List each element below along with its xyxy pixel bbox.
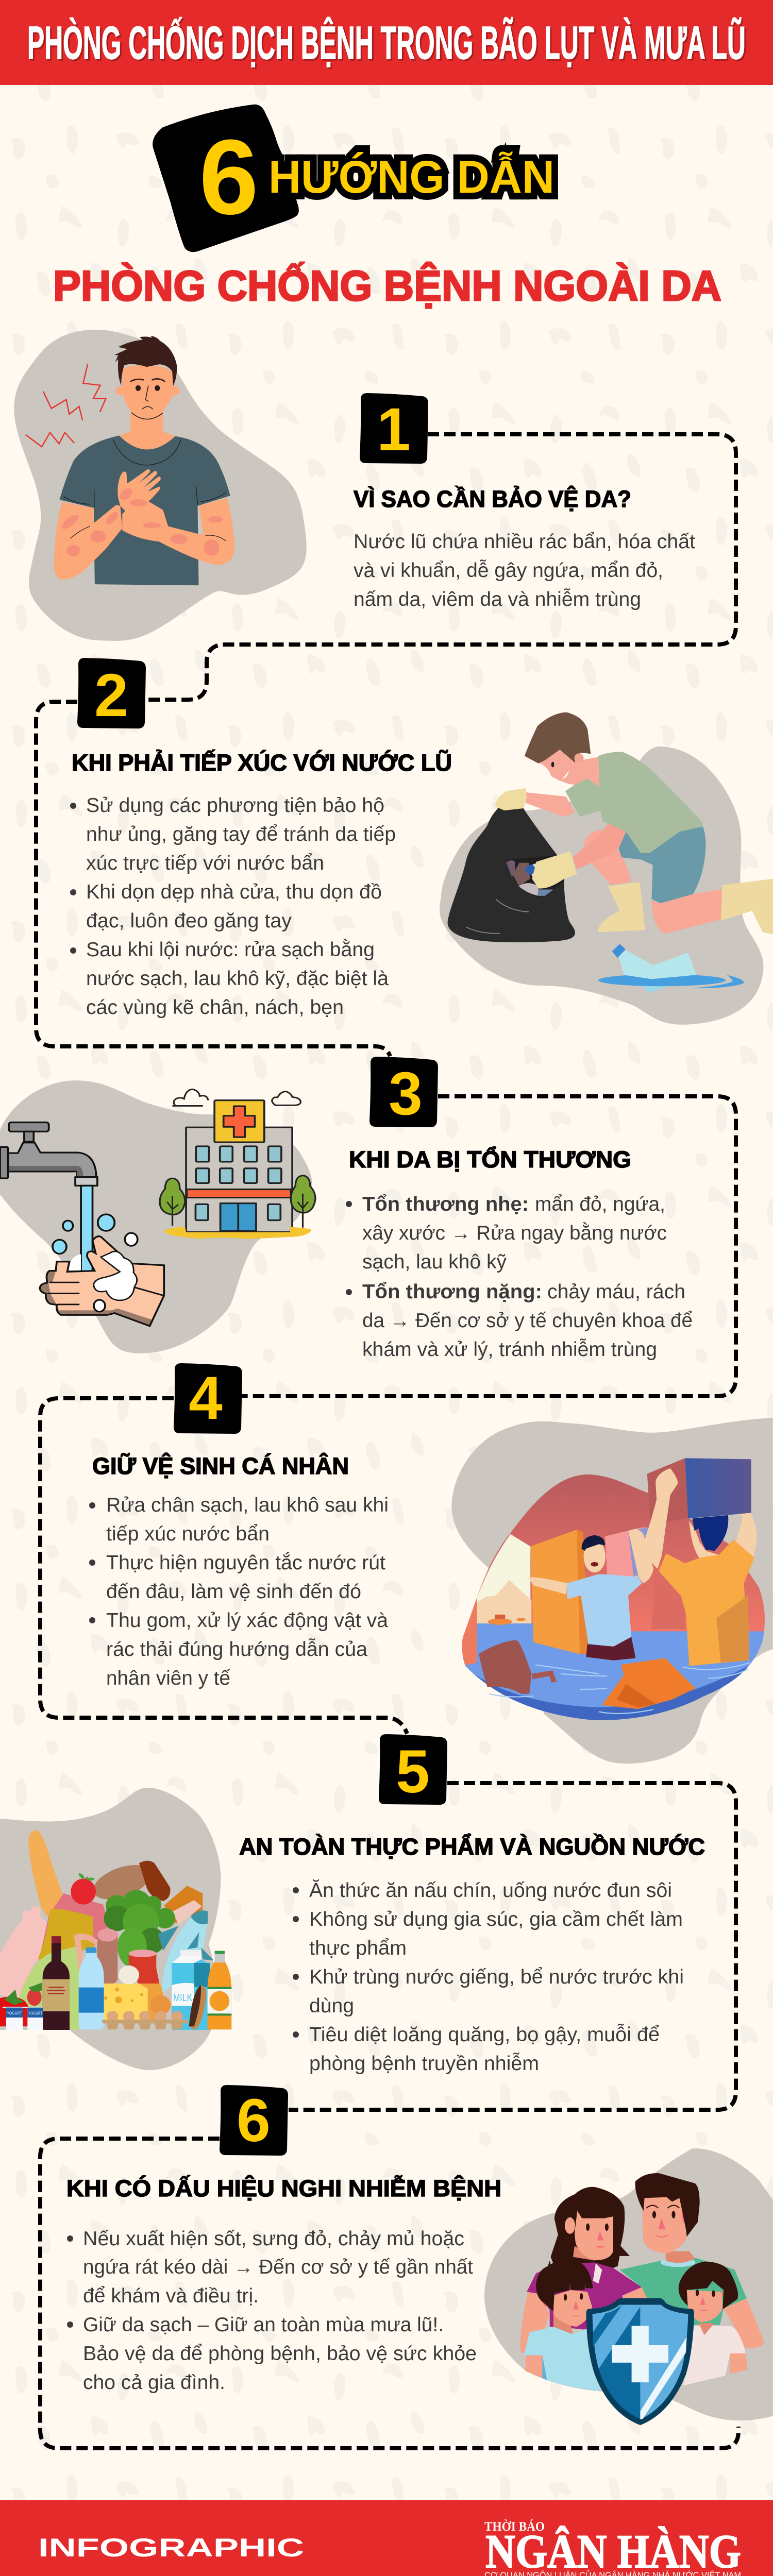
illustration: family with shield bbox=[484, 2148, 773, 2425]
illustration: man collecting garbage bbox=[440, 712, 773, 1025]
number badge 3: 3 bbox=[389, 1060, 423, 1128]
footer banner bbox=[0, 2500, 773, 2576]
number badge 1 bbox=[360, 393, 428, 464]
panel 3: when skin is injured bbox=[0, 1057, 693, 1361]
panel 1: why protect skin bbox=[14, 330, 695, 641]
bullet list 5: dùng bbox=[309, 1995, 354, 2017]
bullet list 4: đến đâu, làm vệ sinh đến đó bbox=[106, 1581, 361, 1603]
bullet list 2: như ủng, găng tay để tránh da tiếp bbox=[86, 823, 396, 845]
heading 4: GIỮ VỆ SINH CÁ NHÂN bbox=[92, 1453, 349, 1479]
panel 2: contact with flood water bbox=[70, 658, 773, 1025]
number badge 1: 1 bbox=[377, 396, 411, 464]
bullet list 3: da → Đến cơ sở y tế chuyên khoa để bbox=[362, 1310, 693, 1332]
heading 2: KHI PHẢI TIẾP XÚC VỚI NƯỚC LŨ bbox=[72, 750, 452, 776]
panel 6: signs of infection bbox=[66, 2085, 773, 2425]
heading 1: VÌ SAO CẦN BẢO VỆ DA? bbox=[354, 486, 631, 512]
number badge 2 bbox=[77, 658, 146, 730]
bullet list 2: xúc trực tiếp với nước bẩn bbox=[86, 852, 324, 874]
number badge 3 bbox=[369, 1057, 438, 1128]
heading 6: KHI CÓ DẤU HIỆU NGHI NHIỄM BỆNH bbox=[66, 2175, 501, 2201]
bullet list 4: tiếp xúc nước bẩn bbox=[106, 1523, 270, 1545]
bullet list 3: chảy máu, rách bbox=[547, 1281, 685, 1303]
illustration: man with skin rash bbox=[14, 330, 307, 641]
hướng dẫn text: HƯỚNG DẪN bbox=[268, 151, 554, 202]
bullet list 5: Không sử dụng gia súc, gia cầm chết làm bbox=[309, 1908, 683, 1930]
bullet list 2: đạc, luôn đeo găng tay bbox=[86, 910, 292, 932]
heading 3: KHI DA BỊ TỔN THƯƠNG bbox=[349, 1146, 631, 1173]
bullet list 3: mẩn đỏ, ngứa, bbox=[535, 1193, 665, 1215]
bullet list 3: sạch, lau khô kỹ bbox=[362, 1251, 507, 1273]
bullet list 4: Thực hiện nguyên tắc nước rút bbox=[106, 1552, 385, 1574]
black tilted block bbox=[153, 105, 299, 252]
panel 4: personal hygiene bbox=[89, 1363, 773, 1764]
bullet list 4: Thu gom, xử lý xác động vật và bbox=[106, 1609, 388, 1632]
illustration: hand washing and hospital bbox=[0, 1080, 315, 1353]
bullet list 5 bbox=[293, 1879, 684, 2075]
bullet list 2: Sau khi lội nước: rửa sạch bằng bbox=[86, 939, 375, 961]
bullet list 3: Tổn thương nhẹ: bbox=[362, 1193, 529, 1215]
bullet list 3: khám và xử lý, tránh nhiễm trùng bbox=[362, 1338, 657, 1361]
bullet list 5: thực phẩm bbox=[309, 1937, 407, 1959]
bullet list 2: Khi dọn dẹp nhà cửa, thu dọn đồ bbox=[86, 881, 382, 903]
big number 6: 6 bbox=[199, 117, 259, 236]
bullet list 6: Nếu xuất hiện sốt, sưng đỏ, chảy mủ hoặc bbox=[83, 2228, 464, 2250]
bullet list 5: phòng bệnh truyền nhiễm bbox=[309, 2053, 539, 2075]
bullet list 4: nhân viên y tế bbox=[106, 1667, 230, 1689]
bullet list 3 bbox=[346, 1193, 693, 1361]
illustration: groceries: MILK bbox=[173, 1992, 192, 2004]
bullet list 6: cho cả gia đình. bbox=[83, 2371, 225, 2394]
illustration: groceries bbox=[0, 1788, 231, 2070]
number badge 4: 4 bbox=[189, 1364, 223, 1432]
newspaper logo: THỜI BÁO bbox=[484, 2519, 545, 2534]
bullet list 6: Bảo vệ da để phòng bệnh, bảo vệ sức khỏe bbox=[83, 2343, 477, 2365]
bullet list 4: rác thải đúng hướng dẫn của bbox=[106, 1638, 367, 1660]
subtitle: PHÒNG CHỐNG BỆNH NGOÀI DA bbox=[53, 262, 721, 310]
illustration: groceries: YOGURT bbox=[28, 2011, 43, 2016]
bullet list 3: Tổn thương nặng: bbox=[362, 1281, 542, 1303]
bullet list 6: Giữ da sạch – Giữ an toàn mùa mưa lũ!. bbox=[83, 2314, 444, 2336]
number badge 4 bbox=[174, 1363, 242, 1434]
bullet list 5: Khử trùng nước giếng, bể nước trước khi bbox=[309, 1966, 684, 1988]
header banner bbox=[0, 0, 773, 85]
infographic label: INFOGRAPHIC bbox=[38, 2533, 304, 2562]
bullet list 6: để khám và điều trị. bbox=[83, 2285, 259, 2307]
bullet list 5: Ăn thức ăn nấu chín, uống nước đun sôi bbox=[309, 1879, 672, 1902]
dashed connector path bbox=[36, 434, 738, 2448]
bullet list 2: nước sạch, lau khô kỹ, đặc biệt là bbox=[86, 968, 389, 990]
number badge 5 bbox=[379, 1734, 447, 1806]
bullet list 6 bbox=[67, 2228, 477, 2394]
number badge 6 bbox=[220, 2085, 288, 2156]
heading 5: AN TOÀN THỰC PHẨM VÀ NGUỒN NƯỚC bbox=[239, 1834, 705, 1860]
main heading: 6 hướng dẫn bbox=[153, 105, 554, 252]
body text 1: Nước lũ chứa nhiều rác bẩn, hóa chất bbox=[354, 531, 695, 553]
body text 1 bbox=[354, 531, 695, 611]
number badge 2: 2 bbox=[94, 662, 128, 730]
bullet list 2: Sử dụng các phương tiện bảo hộ bbox=[86, 794, 384, 817]
body text 1: và vi khuẩn, dễ gây ngứa, mẩn đỏ, bbox=[354, 560, 663, 582]
bullet list 6: ngứa rát kéo dài → Đến cơ sở y tế gần nhất bbox=[83, 2256, 473, 2278]
bullet list 4 bbox=[89, 1494, 389, 1689]
bullet list 4: Rửa chân sạch, lau khô sau khi bbox=[106, 1494, 389, 1516]
body text 1: nấm da, viêm da và nhiễm trùng bbox=[354, 588, 641, 611]
bullet list 2 bbox=[70, 794, 396, 1019]
panel 5: food and water safety bbox=[0, 1734, 705, 2075]
number badge 5: 5 bbox=[396, 1738, 430, 1806]
number badge 6: 6 bbox=[237, 2087, 271, 2155]
bullet list 5: Tiêu diệt loăng quăng, bọ gậy, muỗi để bbox=[309, 2024, 660, 2046]
bullet list 2: các vùng kẽ chân, nách, bẹn bbox=[86, 996, 344, 1019]
illustration: groceries: YOGURT bbox=[7, 2011, 22, 2016]
bullet list 3: xây xước → Rửa ngay bằng nước bbox=[362, 1222, 667, 1244]
illustration: people in flood bbox=[451, 1418, 773, 1764]
